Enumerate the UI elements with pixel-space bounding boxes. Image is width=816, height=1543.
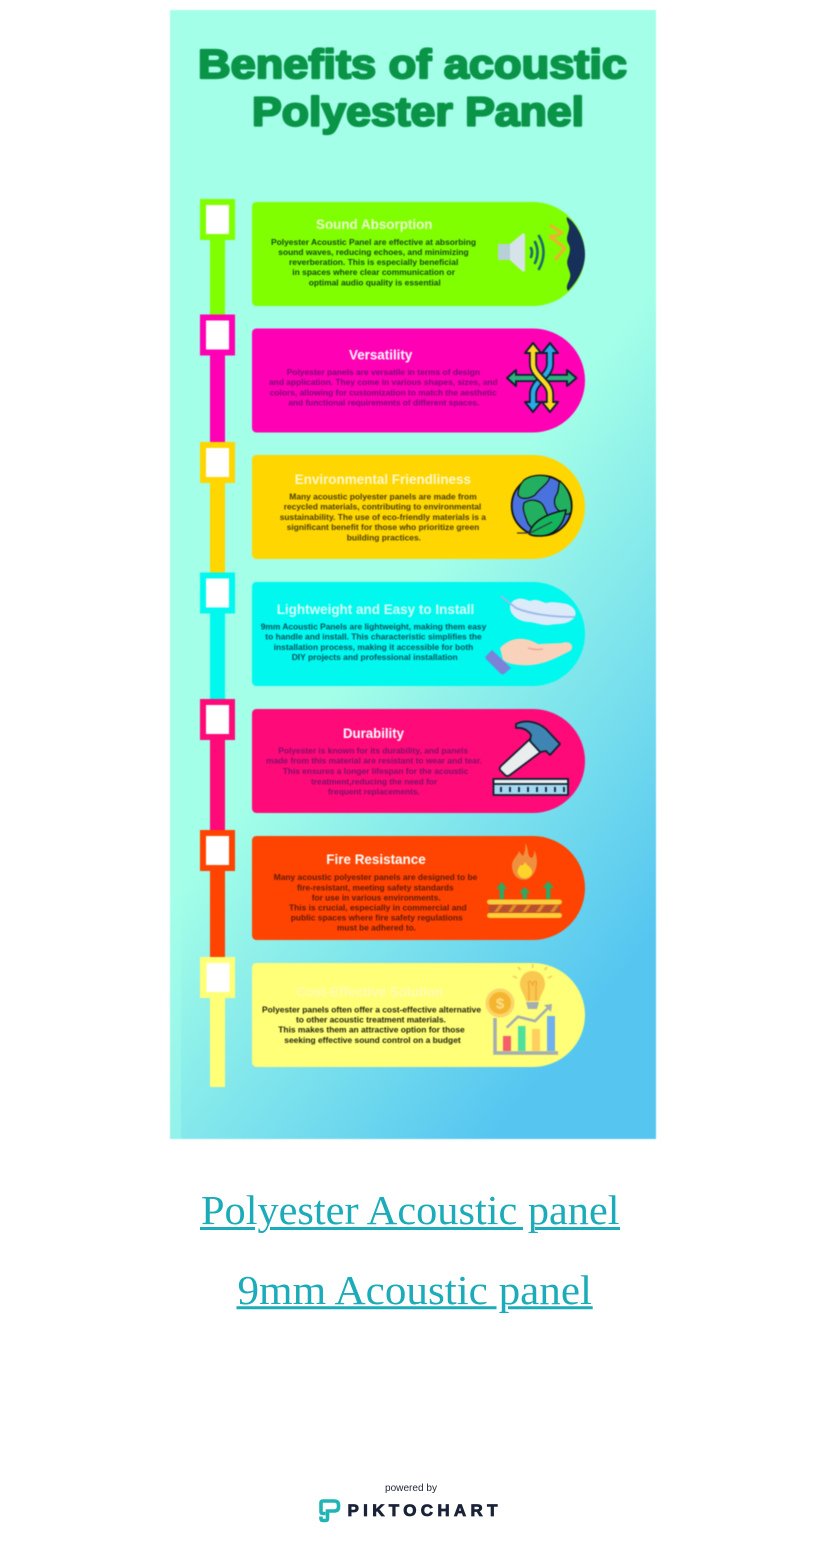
icon: hammer on panel xyxy=(494,722,568,795)
text: Fire Resistance body: This is crucial, especially in commercial and xyxy=(289,902,467,912)
text: Durability body: Polyester is known for its durability, and panels xyxy=(278,745,468,755)
heading: Environmental Friendliness: Environmental Friendliness xyxy=(295,471,471,487)
text: Environmental Friendliness body: Many acoustic polyester panels are made from xyxy=(289,492,477,502)
text: Fire Resistance body: Many acoustic polyester panels are designed to be xyxy=(274,872,477,882)
text: Versatility body: and application. They come in various shapes, sizes, and xyxy=(269,377,498,387)
text: Fire Resistance body: fire-resistant, meeting safety standards xyxy=(297,882,454,892)
icon: coin, light bulb and growth chart xyxy=(486,964,558,1053)
heading: Fire Resistance: Fire Resistance xyxy=(326,851,426,867)
text: Durability body: This ensures a longer lifespan for the acoustic xyxy=(283,766,468,776)
text: Durability body: frequent replacements. xyxy=(328,787,420,797)
text: Environmental Friendliness body: sustainability. The use of eco-friendly materials is a xyxy=(280,512,486,522)
text: Cost-Effective body xyxy=(262,1004,481,1045)
text: Sound Absorption body: in spaces where clear communication or xyxy=(292,267,456,277)
title: Benefits of acoustic xyxy=(198,41,627,87)
link: Polyester Acoustic panel: Polyester Acoustic panel xyxy=(201,1187,620,1233)
text: Durability body xyxy=(266,745,482,797)
text: Sound Absorption body xyxy=(271,237,476,287)
text: Sound Absorption body: Polyester Acoustic Panel are effective at absorbing xyxy=(271,237,476,247)
text: Versatility body: and functional requirements of different spaces. xyxy=(288,397,479,407)
text: Environmental Friendliness body: recycled materials, contributing to environmental xyxy=(284,502,481,512)
heading: Lightweight and Easy to Install: Lightweight and Easy to Install xyxy=(277,601,474,617)
text: Fire Resistance body: for use in various environments. xyxy=(312,892,441,902)
icon: flame over panel with arrows xyxy=(487,843,562,918)
text: Cost-Effective body: to other acoustic treatment materials. xyxy=(296,1014,446,1024)
text: Cost-Effective body: seeking effective sound control on a budget xyxy=(284,1035,461,1045)
text: Environmental Friendliness body: significant benefit for those who prioritize green xyxy=(287,522,479,532)
text: Environmental Friendliness body: building practices. xyxy=(347,532,421,542)
text: Versatility body: colors, allowing for customization to match the aesthetic xyxy=(270,387,497,397)
heading: Durability: Durability xyxy=(343,725,404,741)
timeline xyxy=(200,199,235,1087)
card: Versatility xyxy=(252,328,585,433)
icon: globe with leaf xyxy=(512,475,572,536)
icon: coin, light bulb and growth chart: $ xyxy=(496,996,505,1012)
text: Lightweight body: to handle and install. This characteristic simplifies the xyxy=(265,632,482,642)
text: Sound Absorption body: sound waves, reducing echoes, and minimizing xyxy=(278,247,469,257)
text: Cost-Effective body: This makes them an attractive option for those xyxy=(278,1025,465,1035)
icon: Piktochart logo xyxy=(321,1501,338,1520)
text: Lightweight body xyxy=(261,622,486,662)
icon: feather over open hand xyxy=(486,596,576,674)
title: Polyester Panel xyxy=(252,88,584,134)
text: Lightweight body: installation process, making it accessible for both xyxy=(274,642,473,652)
card: Durability xyxy=(252,709,585,813)
text: Sound Absorption body: optimal audio quality is essential xyxy=(309,277,441,287)
card: Sound Absorption xyxy=(252,202,585,306)
text: Environmental Friendliness body xyxy=(280,492,486,542)
footer: powered by Piktochart xyxy=(321,1483,498,1520)
icon: speaker with sound waves xyxy=(498,217,585,291)
text: powered by: powered by xyxy=(385,1483,437,1494)
card: Cost-Effective Solution xyxy=(252,963,585,1067)
text: Durability body: made from this material are resistant to wear and tear. xyxy=(266,756,482,766)
heading: Cost-Effective Solution: Cost-Effective Solution xyxy=(296,984,443,1000)
heading: Sound Absorption: Sound Absorption xyxy=(316,216,432,232)
card: Environmental Friendliness xyxy=(252,455,585,559)
text: Lightweight body: DIY projects and professional installation xyxy=(292,652,458,662)
text: Cost-Effective body: Polyester panels often offer a cost-effective alternative xyxy=(262,1004,481,1014)
heading: Versatility: Versatility xyxy=(349,346,412,362)
text: Fire Resistance body xyxy=(274,872,477,933)
text: Fire Resistance body: public spaces where fire safety regulations xyxy=(291,912,463,922)
text: Fire Resistance body: must be adhered to. xyxy=(337,923,416,933)
text: Versatility body xyxy=(269,367,498,407)
text: Durability body: treatment,reducing the need for xyxy=(311,776,438,786)
panel: infographic xyxy=(170,10,656,1139)
card: Lightweight and Easy to Install xyxy=(252,582,585,686)
text: Versatility body: Polyester panels are versatile in terms of design xyxy=(287,367,480,377)
text: Sound Absorption body: reverberation. This is especially beneficial xyxy=(289,257,458,267)
link: 9mm Acoustic panel: 9mm Acoustic panel xyxy=(238,1267,592,1313)
title xyxy=(198,41,627,134)
icon: crossing arrows xyxy=(507,343,576,412)
text: Lightweight body: 9mm Acoustic Panels are lightweight, making them easy xyxy=(261,622,486,632)
card: Fire Resistance xyxy=(252,836,585,940)
wordmark: PIKTOCHART xyxy=(348,1501,498,1520)
